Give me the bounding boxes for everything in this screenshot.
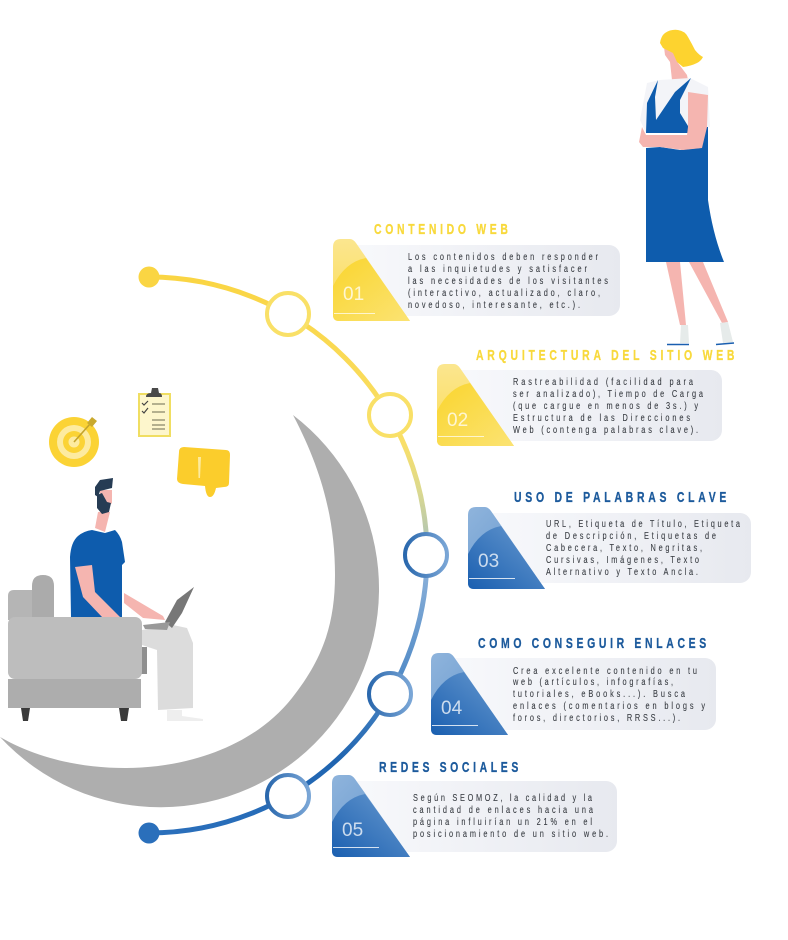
icon: target	[49, 417, 99, 467]
body text 03	[546, 518, 741, 577]
heading 01: CONTENIDO WEB	[374, 221, 508, 237]
body text 05: cantidad de enlaces hacia una	[413, 804, 594, 815]
body text 04: foros, directorios, RRSS...).	[513, 712, 680, 723]
heading 05: REDES SOCIALES	[379, 759, 518, 775]
illustration: man on sofa	[8, 478, 203, 721]
body text 01: (interactivo, actualizado, claro,	[408, 287, 600, 298]
gray crescent	[0, 415, 379, 807]
body text 04: web (artículos, infografías,	[512, 676, 673, 687]
panel 03: palabras clave	[468, 489, 751, 589]
body text 01	[408, 251, 608, 310]
icon: clipboard	[139, 388, 170, 436]
body text 03: Alternativo y Texto Ancla.	[546, 566, 698, 577]
body text 02: Rastreabilidad (facilidad para	[513, 376, 694, 387]
body text 02: Web (contenga palabras clave).	[513, 424, 698, 435]
timeline arc	[138, 266, 447, 844]
body text 01: novedoso, interesante, etc.).	[408, 299, 580, 310]
panel 02: arquitectura: 02	[447, 410, 468, 431]
panel 04: enlaces	[431, 635, 716, 735]
panel 01: contenido web	[333, 221, 620, 321]
body text 03: de Descripción, Etiquetas de	[546, 530, 716, 541]
panel 04: enlaces: 04	[441, 698, 463, 719]
body text 01: las necesidades de los visitantes	[408, 275, 608, 286]
body text 05: página influirían un 21% en el	[413, 816, 592, 827]
body text 01: a las inquietudes y satisfacer	[408, 263, 587, 274]
illustration: standing woman	[639, 30, 734, 345]
panel 02: arquitectura	[437, 347, 734, 446]
panel 03: palabras clave: 03	[478, 551, 499, 572]
body text 03: Cabecera, Texto, Negritas,	[546, 542, 702, 553]
body text 02: ser analizado), Tiempo de Carga	[513, 388, 704, 399]
icon: alert speech bubble	[177, 447, 230, 497]
heading 04: COMO CONSEGUIR ENLACES	[478, 635, 706, 651]
body text 03: Cursivas, Imágenes, Texto	[546, 554, 699, 565]
body text 03: URL, Etiqueta de Título, Etiqueta	[546, 518, 741, 529]
heading 02: ARQUITECTURA DEL SITIO WEB	[476, 347, 734, 363]
body text 02: Estructura de las Direcciones	[513, 412, 690, 423]
body text 04: tutoriales, eBooks...). Busca	[513, 688, 686, 699]
panel 05: redes sociales	[332, 759, 617, 857]
body text 02	[513, 376, 704, 435]
body text 05	[413, 792, 608, 839]
heading 03: USO DE PALABRAS CLAVE	[514, 489, 726, 505]
body text 05: Según SEOMOZ, la calidad y la	[413, 792, 593, 803]
body text 04	[512, 665, 705, 723]
body text 04: enlaces (comentarios en blogs y	[513, 700, 705, 711]
body text 05: posicionamiento de un sitio web.	[413, 828, 608, 839]
body text 04: Crea excelente contenido en tu	[513, 665, 697, 676]
panel 01: contenido web: 01	[343, 284, 364, 305]
body text 01: Los contenidos deben responder	[408, 251, 598, 262]
body text 02: (que cargue en menos de 3s.) y	[513, 400, 698, 411]
panel 05: redes sociales: 05	[342, 820, 363, 841]
